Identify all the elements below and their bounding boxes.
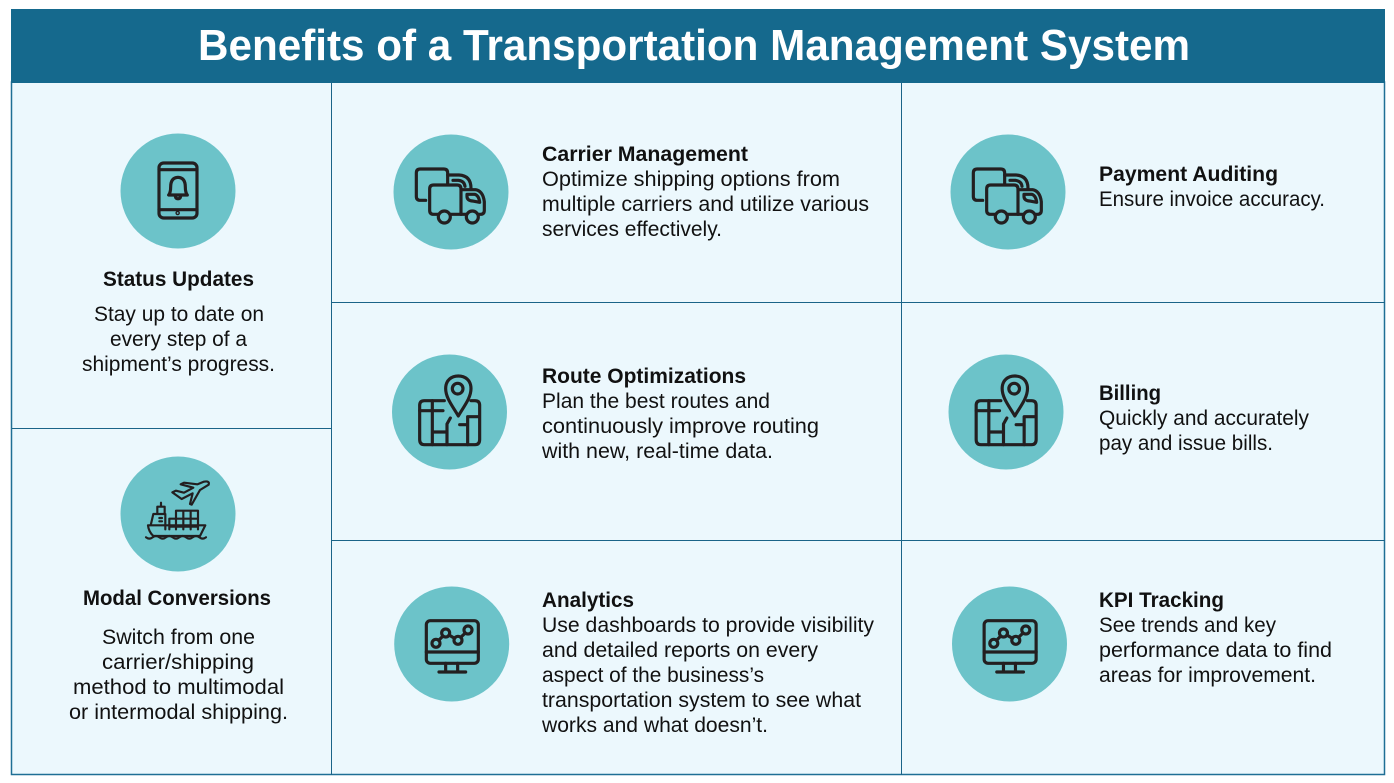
heading: Status Updates — [103, 267, 254, 291]
text block — [82, 302, 275, 376]
heading: Carrier Management — [542, 142, 748, 166]
text block: multiple carriers and utilize various — [542, 192, 869, 216]
title banner: Benefits of a Transportation Management System — [198, 21, 1190, 70]
text block: shipment’s progress. — [82, 352, 275, 376]
panel: carrier management — [394, 134, 869, 250]
icon: map pin — [392, 354, 507, 470]
panel: analytics — [394, 586, 874, 737]
text block: Ensure invoice accuracy. — [1099, 187, 1325, 211]
heading: Billing — [1099, 381, 1161, 405]
panel: payment auditing — [950, 134, 1325, 250]
text block — [1099, 406, 1309, 455]
panel: status updates — [82, 134, 275, 376]
icon: monitor chart — [952, 586, 1067, 702]
heading: Analytics — [542, 588, 634, 612]
text block — [541, 613, 874, 737]
icon: monitor chart — [394, 586, 509, 702]
text block: Optimize shipping options from — [542, 167, 840, 191]
text block: Use dashboards to provide visibility — [542, 613, 874, 637]
text block — [542, 167, 869, 241]
text block: See trends and key — [1099, 613, 1276, 637]
panel: kpi tracking — [952, 586, 1332, 702]
text block: performance data to find — [1099, 638, 1332, 662]
heading: KPI Tracking — [1099, 588, 1224, 612]
text block: Plan the best routes and — [542, 389, 770, 413]
text block: continuously improve routing — [542, 414, 819, 438]
icon: ship and plane — [120, 456, 236, 572]
text block: method to multimodal — [73, 675, 284, 699]
heading: Modal Conversions — [83, 586, 271, 610]
heading: Route Optimizations — [542, 364, 746, 388]
text block: carrier/shipping — [102, 650, 254, 674]
title banner — [11, 9, 1385, 83]
panel: modal conversions — [69, 456, 288, 724]
heading: Payment Auditing — [1099, 162, 1278, 186]
icon: trucks — [394, 134, 508, 250]
text block: every step of a — [110, 327, 247, 351]
icon: trucks — [950, 134, 1066, 250]
panel: route optimizations — [392, 354, 819, 470]
text block: and detailed reports on every — [542, 638, 818, 662]
icon: tablet with bell — [120, 134, 236, 248]
text block: pay and issue bills. — [1099, 431, 1273, 455]
text block: or intermodal shipping. — [69, 700, 288, 724]
text block: areas for improvement. — [1099, 663, 1316, 687]
text block: aspect of the business’s — [542, 663, 764, 687]
text block: transportation system to see what — [542, 688, 861, 712]
text block — [541, 389, 819, 463]
text block — [1099, 613, 1332, 687]
text block: works and what doesn’t. — [541, 713, 768, 737]
panel: billing — [948, 354, 1309, 470]
text block: Switch from one — [102, 625, 255, 649]
icon: map pin — [948, 354, 1064, 470]
text block: with new, real-time data. — [541, 439, 773, 463]
text block: Quickly and accurately — [1099, 406, 1309, 430]
text block: services effectively. — [542, 217, 722, 241]
text block — [69, 625, 288, 724]
text block: Stay up to date on — [94, 302, 264, 326]
